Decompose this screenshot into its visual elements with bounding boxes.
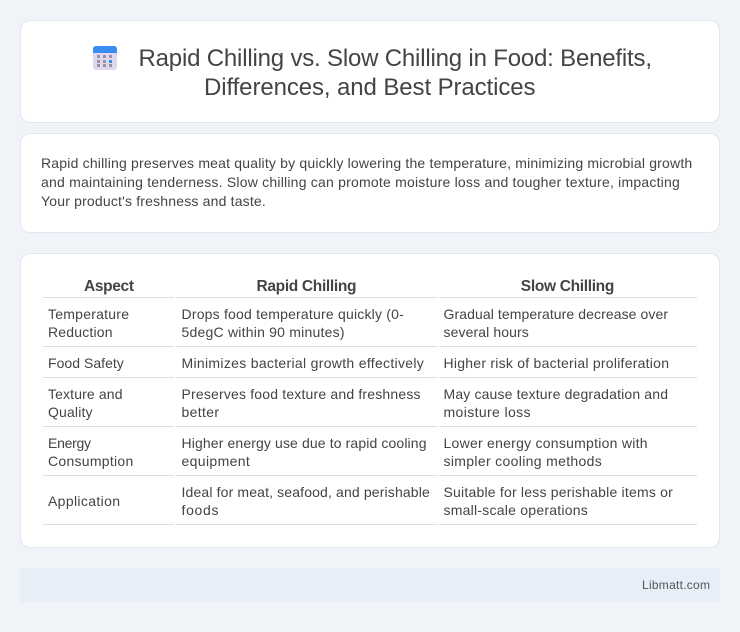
icon: calendar — [93, 46, 117, 70]
table header row — [43, 278, 697, 298]
intro text — [41, 155, 692, 209]
row: application: foods — [182, 502, 218, 518]
row: texture and quality: Texture and — [48, 386, 122, 402]
row: energy consumption — [43, 435, 697, 476]
row: energy consumption: Higher energy use due to rapid cooling — [182, 435, 426, 451]
footer bar — [20, 568, 720, 602]
intro text: Rapid chilling preserves meat quality by quickly lowering the temperature, minimizing microbial growth — [41, 155, 692, 171]
table panel — [20, 253, 720, 548]
row: temperature reduction: Temperature — [48, 306, 129, 322]
header panel — [20, 20, 720, 123]
row: food safety: Minimizes bacterial growth effectively — [182, 355, 424, 371]
row: temperature reduction: Gradual temperature decrease over — [444, 306, 668, 322]
row: energy consumption: Lower energy consumption with — [444, 435, 648, 451]
title: Rapid Chilling vs. Slow Chilling in Food: Benefits, — [138, 45, 652, 72]
row: application: Suitable for less perishable items or — [444, 484, 673, 500]
row: energy consumption: Energy — [48, 435, 91, 451]
row: temperature reduction: several hours — [444, 324, 529, 340]
row: food safety: Higher risk of bacterial proliferation — [444, 355, 669, 371]
row: texture and quality: Preserves food texture and freshness — [182, 386, 420, 402]
title — [138, 45, 652, 101]
row: texture and quality: better — [182, 404, 219, 420]
row: food safety: Food Safety — [48, 355, 124, 371]
row: temperature reduction: Drops food temperature quickly (0- — [182, 306, 404, 322]
footer text: Libmatt.com — [642, 578, 710, 592]
row: application: Application — [48, 493, 120, 509]
row: energy consumption: Consumption — [48, 453, 133, 469]
row: application: small-scale operations — [444, 502, 588, 518]
table header row: Slow Chilling — [521, 278, 614, 295]
table — [43, 278, 697, 525]
intro text: Your product's freshness and taste. — [41, 193, 266, 209]
row: temperature reduction: 5degC within 90 minutes) — [182, 324, 344, 340]
row: texture and quality: May cause texture degradation and — [444, 386, 668, 402]
row: energy consumption: simpler cooling methods — [444, 453, 602, 469]
row: texture and quality: Quality — [48, 404, 92, 420]
row: application — [43, 484, 697, 525]
table header row: Rapid Chilling — [256, 278, 356, 295]
row: application: Ideal for meat, seafood, and perishable — [182, 484, 430, 500]
row: food safety — [43, 355, 697, 378]
row: texture and quality — [43, 386, 697, 427]
intro panel — [20, 133, 720, 233]
row: energy consumption: equipment — [182, 453, 250, 469]
row: temperature reduction: Reduction — [48, 324, 112, 340]
intro text: and maintaining tenderness. Slow chilling can promote moisture loss and tougher texture, impacting — [41, 174, 680, 190]
row: texture and quality: moisture loss — [444, 404, 530, 420]
title: Differences, and Best Practices — [204, 74, 536, 101]
table header row: Aspect — [84, 278, 134, 295]
row: temperature reduction — [43, 306, 697, 347]
